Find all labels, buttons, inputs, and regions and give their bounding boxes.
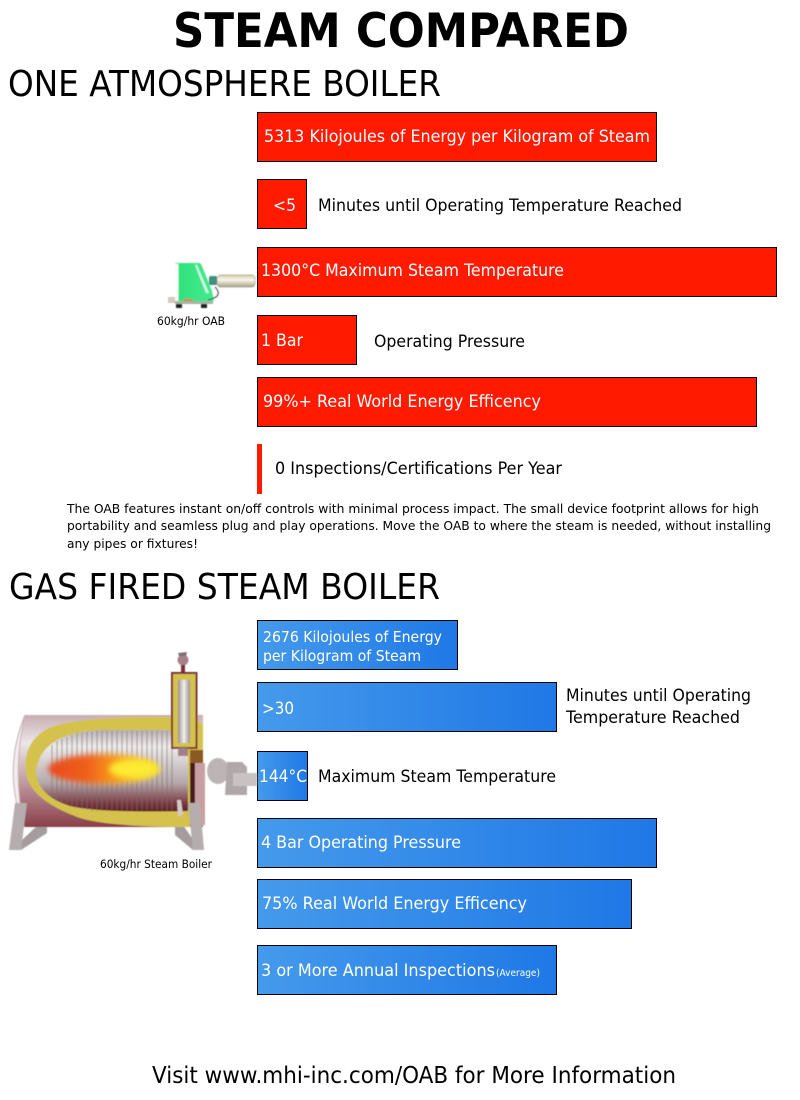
bar: minutes to temperature, gas: >30 bbox=[262, 699, 294, 719]
bar: minutes to temperature, OAB: Minutes until Operating Temperature Reached bbox=[318, 196, 682, 216]
footer: website link: Visit www.mhi-inc.com/OAB for More Information bbox=[152, 1063, 676, 1089]
bar: operating pressure, OAB: Operating Pressure bbox=[374, 332, 525, 352]
bar: maximum steam temperature, OAB: 1300°C Maximum Steam Temperature bbox=[261, 261, 564, 281]
bar: energy efficiency, OAB bbox=[258, 378, 756, 426]
bar: minutes to temperature, OAB bbox=[258, 180, 682, 228]
heading: gas fired steam boiler: GAS FIRED STEAM BOILER bbox=[9, 567, 440, 608]
bar: energy per kilogram, gas: per Kilogram of Steam bbox=[263, 647, 421, 665]
bar: maximum steam temperature, gas bbox=[258, 752, 556, 800]
bar: inspections, gas: 3 or More Annual Inspections bbox=[261, 961, 495, 981]
bar: maximum steam temperature, gas: 144°C bbox=[259, 767, 307, 787]
title: STEAM COMPARED bbox=[173, 4, 629, 59]
bar: inspections, OAB bbox=[257, 444, 562, 494]
bar: operating pressure, gas bbox=[258, 818, 656, 868]
bar: maximum steam temperature, gas: Maximum Steam Temperature bbox=[318, 767, 556, 787]
bar: operating pressure, OAB bbox=[258, 316, 525, 364]
text block: OAB description bbox=[66, 501, 771, 551]
caption: 60kg/hr OAB: 60kg/hr OAB bbox=[157, 314, 225, 328]
bar: maximum steam temperature, OAB bbox=[258, 248, 776, 296]
bar: energy efficiency, gas: 75% Real World Energy Efficency bbox=[262, 894, 527, 914]
caption: 60kg/hr steam boiler: 60kg/hr Steam Boiler bbox=[100, 857, 212, 871]
bar: minutes to temperature, gas: Minutes until Operating bbox=[566, 686, 751, 706]
bar: energy per kilogram, OAB bbox=[258, 112, 656, 162]
heading: one atmosphere boiler: ONE ATMOSPHERE BOILER bbox=[8, 64, 441, 105]
bar: energy per kilogram, gas: 2676 Kilojoules of Energy bbox=[263, 628, 442, 646]
bar: inspections, gas: (Average) bbox=[496, 968, 540, 979]
text block: OAB description: portability and seamless plug and play operations. Move the OAB to where the steam is needed, without installing bbox=[67, 518, 771, 533]
bar: inspections, OAB: 0 Inspections/Certifications Per Year bbox=[275, 459, 562, 479]
bar: minutes to temperature, gas bbox=[258, 682, 751, 732]
icon: gas fired steam boiler cutaway bbox=[9, 652, 257, 850]
icon: green OAB unit bbox=[168, 263, 255, 308]
bar: energy per kilogram, OAB: 5313 Kilojoules of Energy per Kilogram of Steam bbox=[264, 127, 650, 147]
bar: operating pressure, OAB: 1 Bar bbox=[261, 331, 303, 351]
bar: operating pressure, gas: 4 Bar Operating Pressure bbox=[261, 833, 461, 853]
bar: inspections, gas bbox=[258, 946, 556, 994]
bar: energy efficiency, gas bbox=[258, 880, 632, 928]
bar: energy per kilogram, gas bbox=[258, 620, 458, 670]
bar: energy efficiency, OAB: 99%+ Real World Energy Efficency bbox=[263, 392, 541, 412]
bar: minutes to temperature, OAB: <5 bbox=[273, 196, 296, 216]
bar: minutes to temperature, gas: Temperature Reached bbox=[565, 708, 740, 728]
text block: OAB description: any pipes or fixtures! bbox=[67, 536, 198, 551]
text block: OAB description: The OAB features instant on/off controls with minimal process impact. The small device footprint allows for high bbox=[66, 501, 759, 516]
